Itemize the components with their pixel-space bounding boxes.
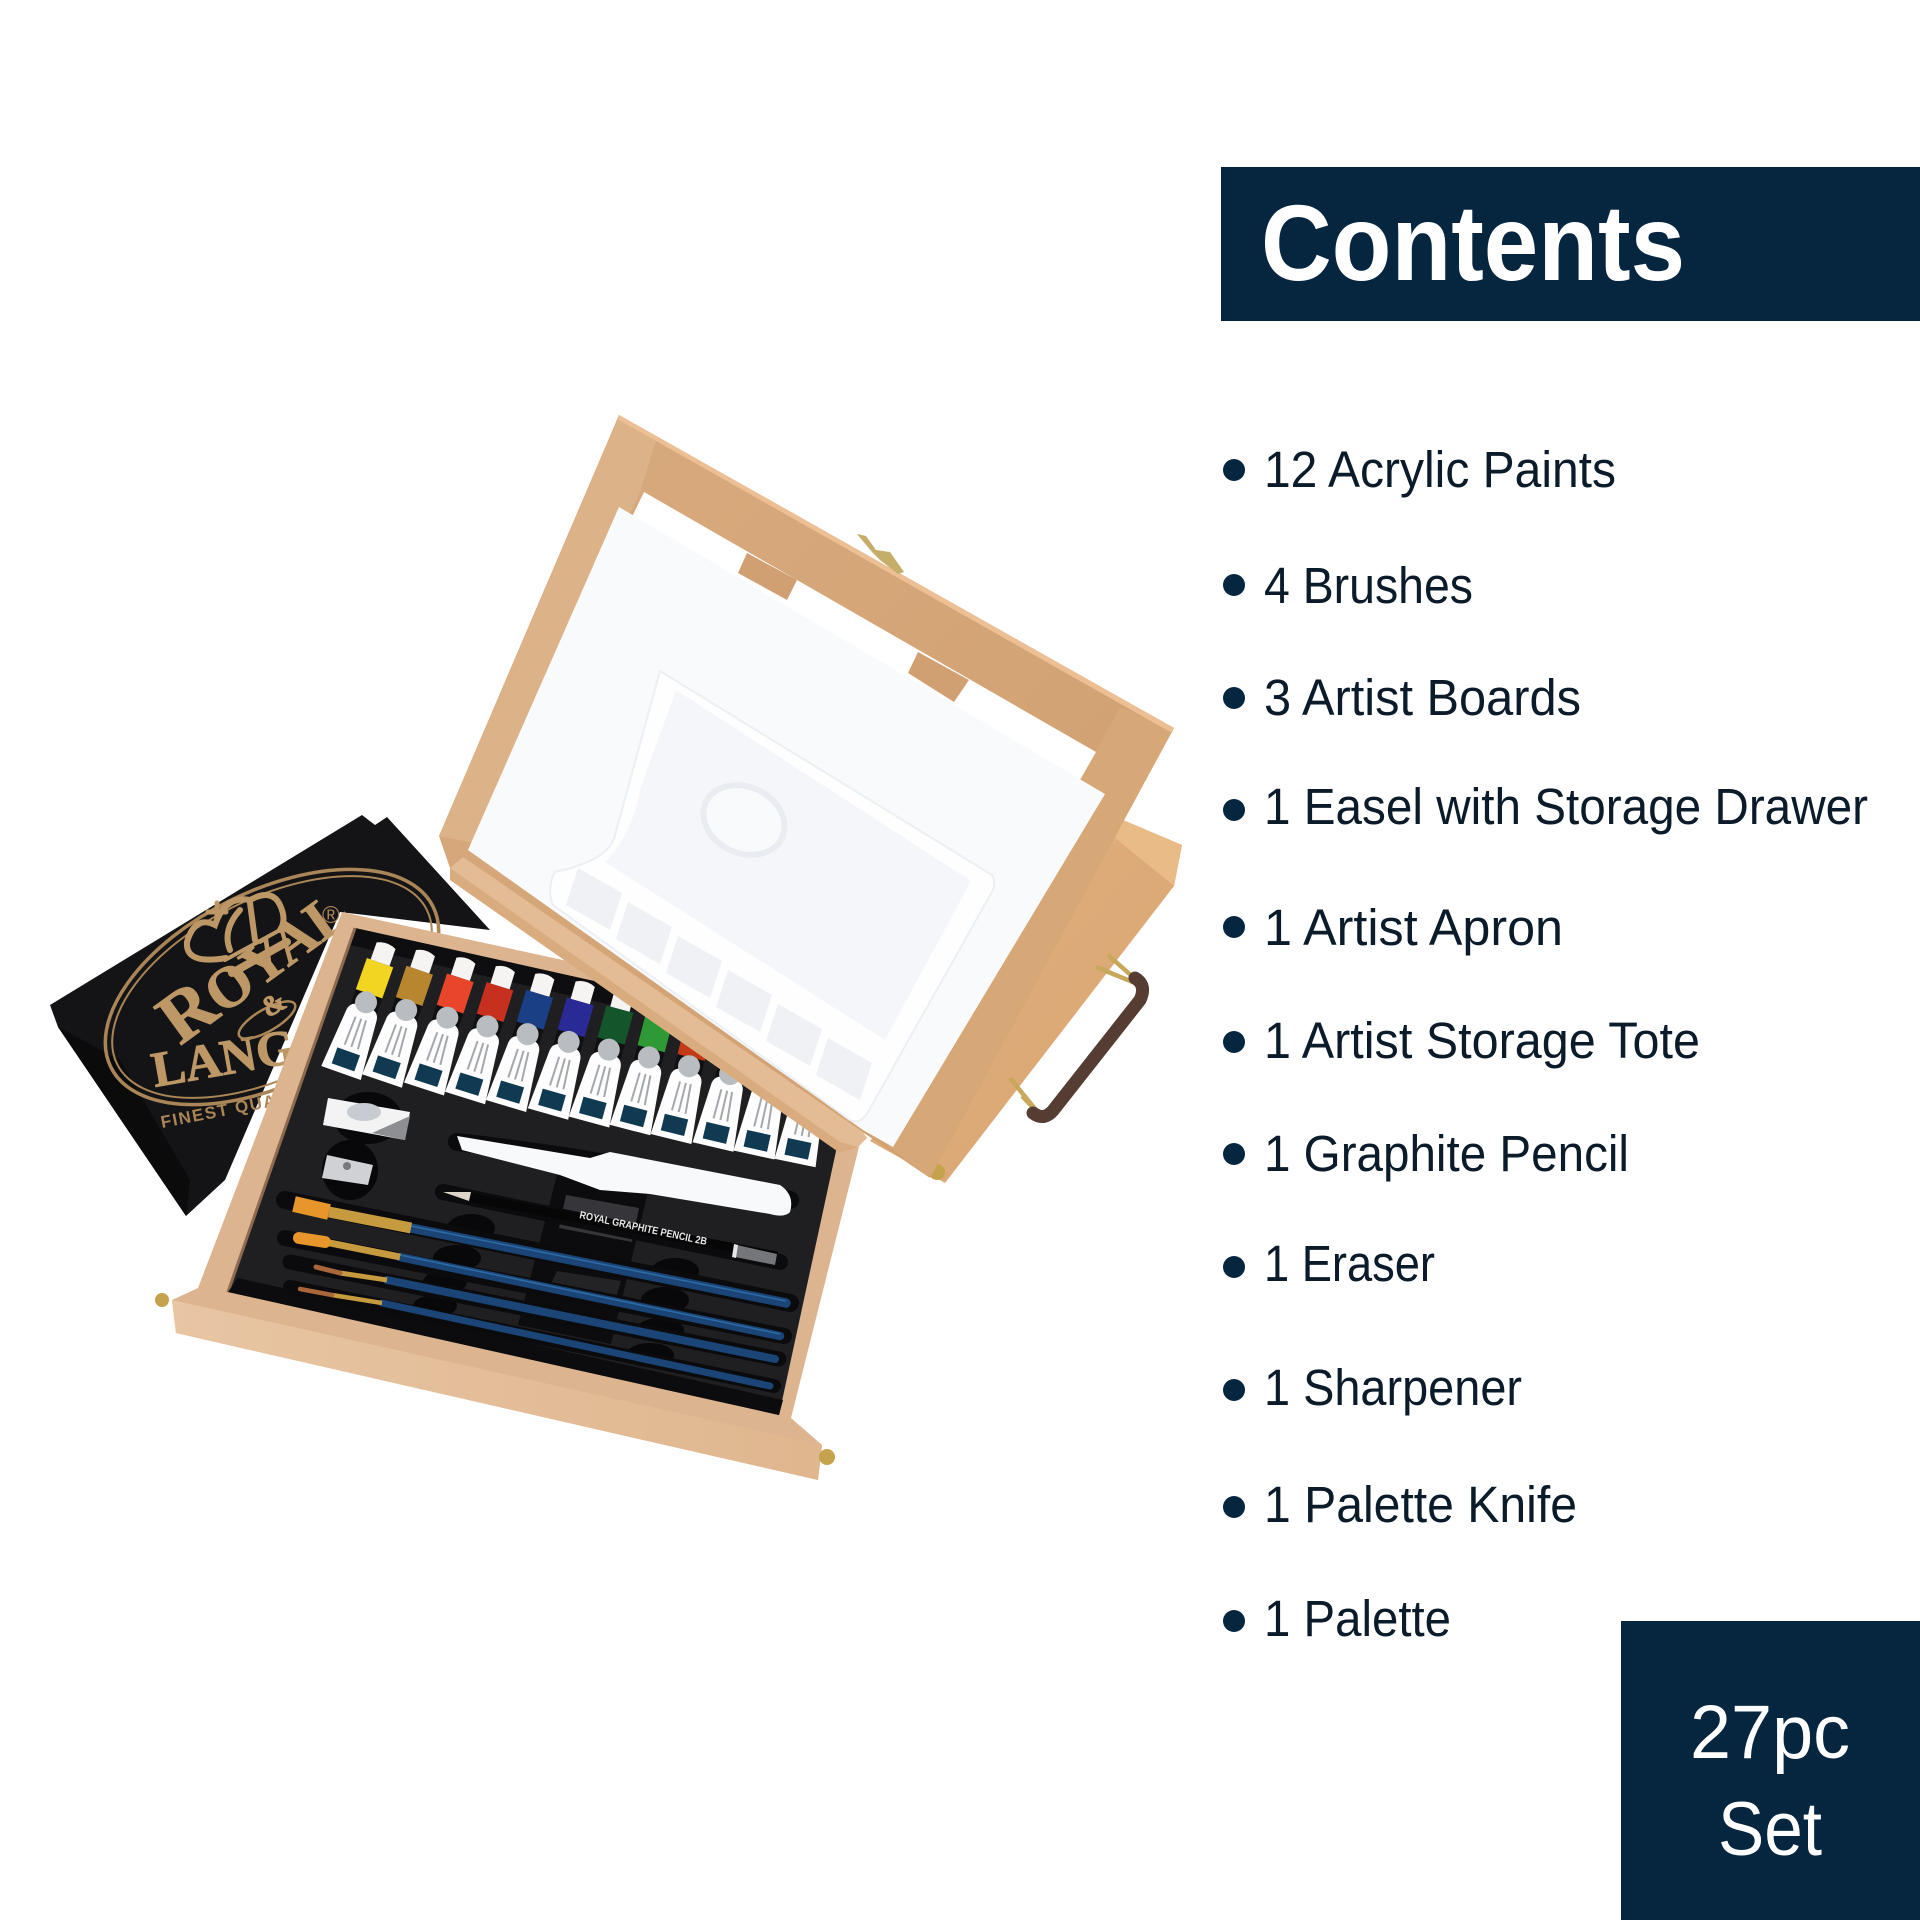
apron brand text: ROYAL: [142, 868, 363, 1059]
contents list: [1223, 441, 1868, 1647]
palette knife: [457, 1136, 791, 1216]
white artist board: [468, 507, 1105, 1147]
mixing palette: [550, 671, 994, 1121]
graphite pencil: [443, 1192, 777, 1265]
easel frame: [439, 415, 1174, 1178]
apron with logo: ®: [322, 902, 340, 929]
tray center column: [518, 1175, 648, 1344]
item: 1 artist storage tote: 1 Artist Storage Tote: [1264, 1012, 1700, 1069]
apron with logo: FINEST QUALITY: [159, 1083, 321, 1132]
eraser: [323, 1098, 410, 1140]
item: 3 artist boards: 3 Artist Boards: [1264, 669, 1581, 726]
apron with logo: LANG: [147, 1018, 299, 1098]
item: 4 brushes: 4 Brushes: [1264, 557, 1473, 614]
drawer front board: [172, 1300, 822, 1480]
palette oval dipper: [692, 772, 796, 868]
item: 1 palette knife: 1 Palette Knife: [1264, 1476, 1577, 1533]
drawer brass catches: [155, 1293, 835, 1465]
tray slots: [322, 1092, 699, 1367]
heading banner: [1221, 167, 1920, 321]
item: 1 sharpener: 1 Sharpener: [1264, 1359, 1522, 1416]
four paint brushes: [294, 1204, 786, 1386]
palette wells: [566, 868, 872, 1100]
acrylic paint tubes: [321, 936, 844, 1167]
easel bottom ledge: [450, 857, 867, 1153]
heading banner: Contents: [1261, 182, 1685, 303]
apron crown emblem: [187, 895, 287, 973]
easel storage box side: [870, 820, 1182, 1183]
set size badge: Set: [1718, 1787, 1822, 1872]
graphite pencil: ROYAL GRAPHITE PENCIL 2B: [578, 1209, 708, 1248]
storage drawer: [172, 912, 885, 1480]
item: 1 easel with storage drawer: 1 Easel with Storage Drawer: [1264, 778, 1868, 835]
easel top latch: [857, 534, 904, 574]
item: 12 acrylic paints: 12 Acrylic Paints: [1264, 441, 1616, 498]
product illustration: easel box art set: [50, 415, 1182, 1480]
carrying handle with brass brackets: [1010, 955, 1143, 1117]
apron with logo: &: [256, 986, 292, 1024]
item: 1 graphite pencil: 1 Graphite Pencil: [1264, 1125, 1629, 1182]
item: 1 palette: 1 Palette: [1264, 1590, 1451, 1647]
set size badge: 27pc: [1690, 1690, 1850, 1775]
apron with logo: [50, 815, 490, 1216]
item: 1 eraser: 1 Eraser: [1264, 1235, 1435, 1292]
easel cross bar pegs: [738, 553, 797, 600]
sharpener: [322, 1155, 373, 1185]
set size badge: [1621, 1621, 1920, 1920]
item: 1 artist apron: 1 Artist Apron: [1264, 899, 1563, 956]
